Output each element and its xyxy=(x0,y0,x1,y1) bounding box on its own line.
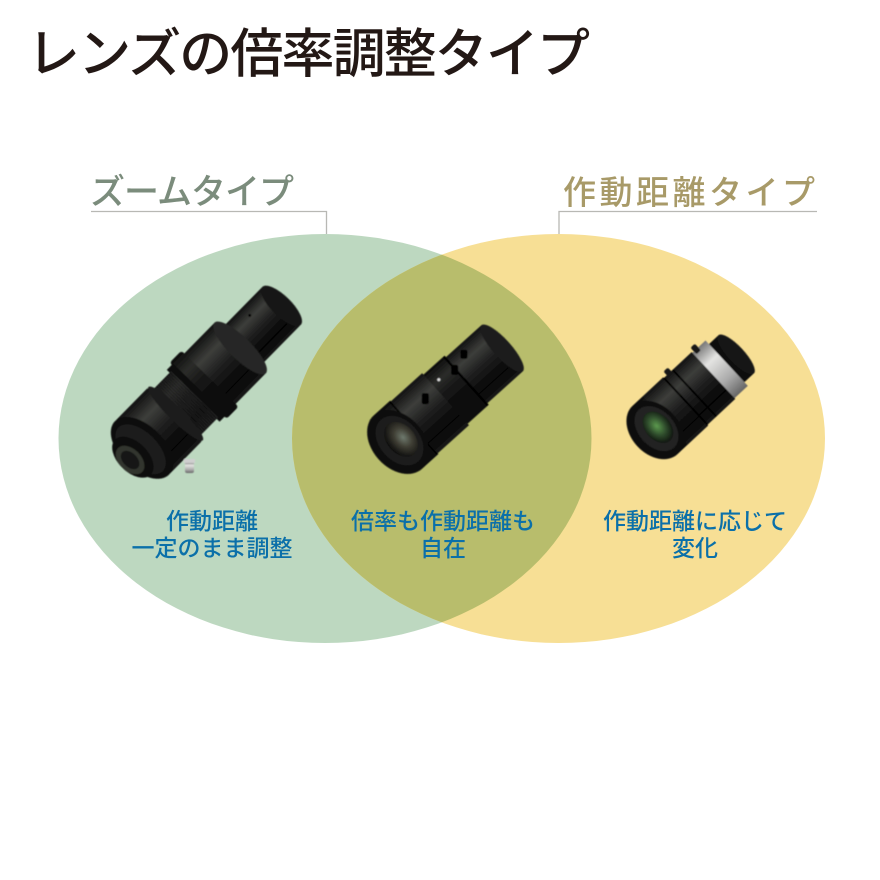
text: both types description: 自在 xyxy=(420,535,466,561)
label: working distance type: 作動距離タイプ xyxy=(563,174,815,211)
text: both types description xyxy=(351,508,535,561)
overlap region xyxy=(292,254,592,622)
thumb screw xyxy=(184,459,195,473)
text: zoom type description: 作動距離 xyxy=(166,508,258,534)
text: working distance type description: 変化 xyxy=(672,535,718,561)
text: zoom type description: 一定のまま調整 xyxy=(132,535,292,561)
circle: zoom type xyxy=(58,234,592,643)
circle: working distance type xyxy=(292,234,825,643)
text: working distance type description xyxy=(603,508,787,561)
venn diagram xyxy=(58,234,825,643)
text: zoom type description xyxy=(132,508,292,561)
icon: zoom type center lens photo xyxy=(355,316,533,486)
label: working distance type xyxy=(559,174,817,234)
text: working distance type description: 作動距離に応じて xyxy=(603,508,787,534)
label: zoom type xyxy=(90,173,326,234)
title: レンズの倍率調整タイプ xyxy=(27,25,590,84)
label: zoom type: ズームタイプ xyxy=(90,173,294,212)
text: both types description: 倍率も作動距離も xyxy=(351,508,535,534)
icon: working distance lens photo xyxy=(612,322,765,471)
icon: zoom lens photo xyxy=(94,271,328,507)
